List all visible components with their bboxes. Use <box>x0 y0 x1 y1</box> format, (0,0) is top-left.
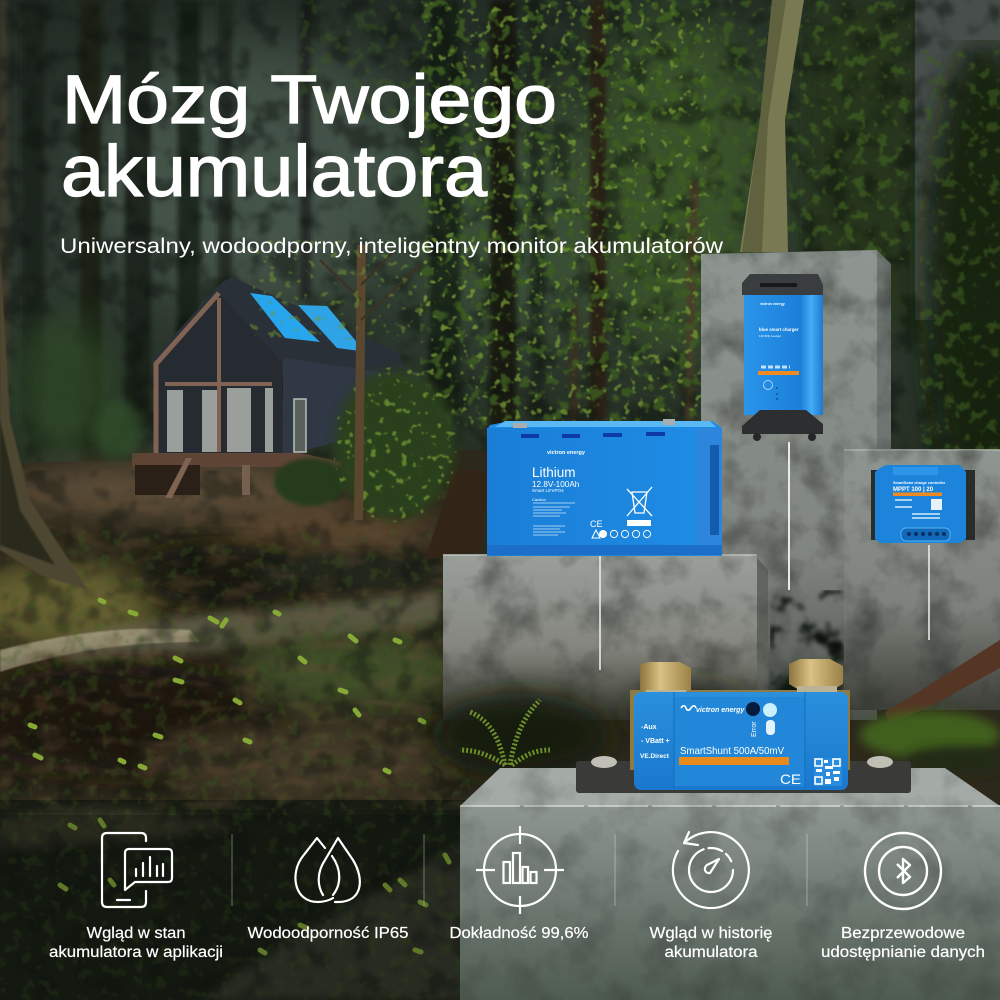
blue smart charger: blue smart charger <box>759 327 799 332</box>
ground <box>0 250 1000 1000</box>
concrete pillars <box>440 250 1000 720</box>
fern <box>460 700 550 765</box>
QR code <box>814 758 842 786</box>
gable front <box>155 293 282 455</box>
MPPT charge controller: MPPT 100 | 20 <box>893 487 934 493</box>
roof <box>150 277 407 376</box>
SmartShunt 500A/50mV: - VBatt + <box>641 738 670 745</box>
plants in front of pillars <box>430 590 1000 780</box>
labels <box>49 925 985 961</box>
subtitle: Uniwersalny, wodoodporny, inteligentny monitor akumulatorów <box>60 234 724 258</box>
large tree base left <box>0 250 88 590</box>
Lithium battery: Lithium <box>532 465 576 480</box>
labels: Wgląd w stan <box>86 925 186 942</box>
Lithium battery: Caution <box>532 497 546 502</box>
title <box>61 61 557 212</box>
cabin with solar panels <box>132 277 420 498</box>
blue smart charger: victron energy <box>760 302 785 306</box>
Lithium battery: 12.8V-100Ah <box>532 480 580 489</box>
side window <box>294 399 306 452</box>
labels: Wgląd w historię <box>650 925 772 942</box>
labels: Wodoodporność IP65 <box>248 925 408 942</box>
labels: Dokładność 99,6% <box>450 925 589 942</box>
SmartShunt 500A/50mV: Error <box>751 721 758 737</box>
Lithium battery <box>487 419 722 556</box>
base and bolts <box>576 659 911 793</box>
icon: precision crosshair <box>476 826 564 914</box>
labels: Bezprzewodowe <box>841 925 965 942</box>
window curtains <box>167 388 273 452</box>
dividers <box>232 834 807 906</box>
icon: bluetooth <box>865 833 941 909</box>
middle pillar <box>757 558 768 720</box>
Lithium battery: CE <box>590 519 603 529</box>
front concrete plinth <box>460 768 1000 1000</box>
shunt body <box>634 692 848 790</box>
background tree trunks <box>0 0 698 480</box>
SmartShunt 500A/50mV: CE <box>780 771 801 787</box>
side wall <box>283 355 420 456</box>
labels: akumulatora <box>664 944 758 961</box>
SmartShunt 500A/50mV: SmartShunt 500A/50mV <box>680 746 784 757</box>
blue smart charger: 12/15(3) 1output <box>759 334 781 338</box>
feature row <box>49 826 985 961</box>
SmartShunt 500A/50mV: VE.Direct <box>640 753 670 760</box>
shrubs around cabin <box>94 240 480 525</box>
icon: phone with chart bubble <box>102 833 172 907</box>
solar panel right <box>298 305 360 351</box>
right pillar <box>844 450 1000 710</box>
dark vignette behind feature row <box>0 815 460 1000</box>
solar panel left <box>250 293 320 342</box>
MPPT charge controller <box>871 465 975 543</box>
MPPT charge controller: SmartSolar charge controller <box>893 481 946 485</box>
SmartShunt 500A/50mV: -Aux <box>641 724 657 731</box>
tree canopy foliage <box>0 0 1000 462</box>
labels: udostępnianie danych <box>821 944 985 961</box>
recycling icon <box>627 487 652 516</box>
title: Mózg Twojego <box>62 61 557 138</box>
Lithium battery: Smart LiFePO4 <box>532 488 564 493</box>
icon: water drops <box>295 838 360 902</box>
fallen bright leaves <box>30 600 449 953</box>
SmartShunt 500A/50mV: victron energy <box>696 707 745 714</box>
tall pillar <box>877 250 891 460</box>
deck <box>132 453 342 467</box>
icon: history gauge <box>673 832 749 908</box>
labels: akumulatora w aplikacji <box>49 944 223 961</box>
blue smart charger <box>742 274 823 441</box>
SmartShunt 500A/50mV <box>576 659 911 793</box>
light seams <box>600 442 929 670</box>
Lithium battery: victron energy <box>547 450 586 456</box>
title: akumulatora <box>61 132 488 212</box>
